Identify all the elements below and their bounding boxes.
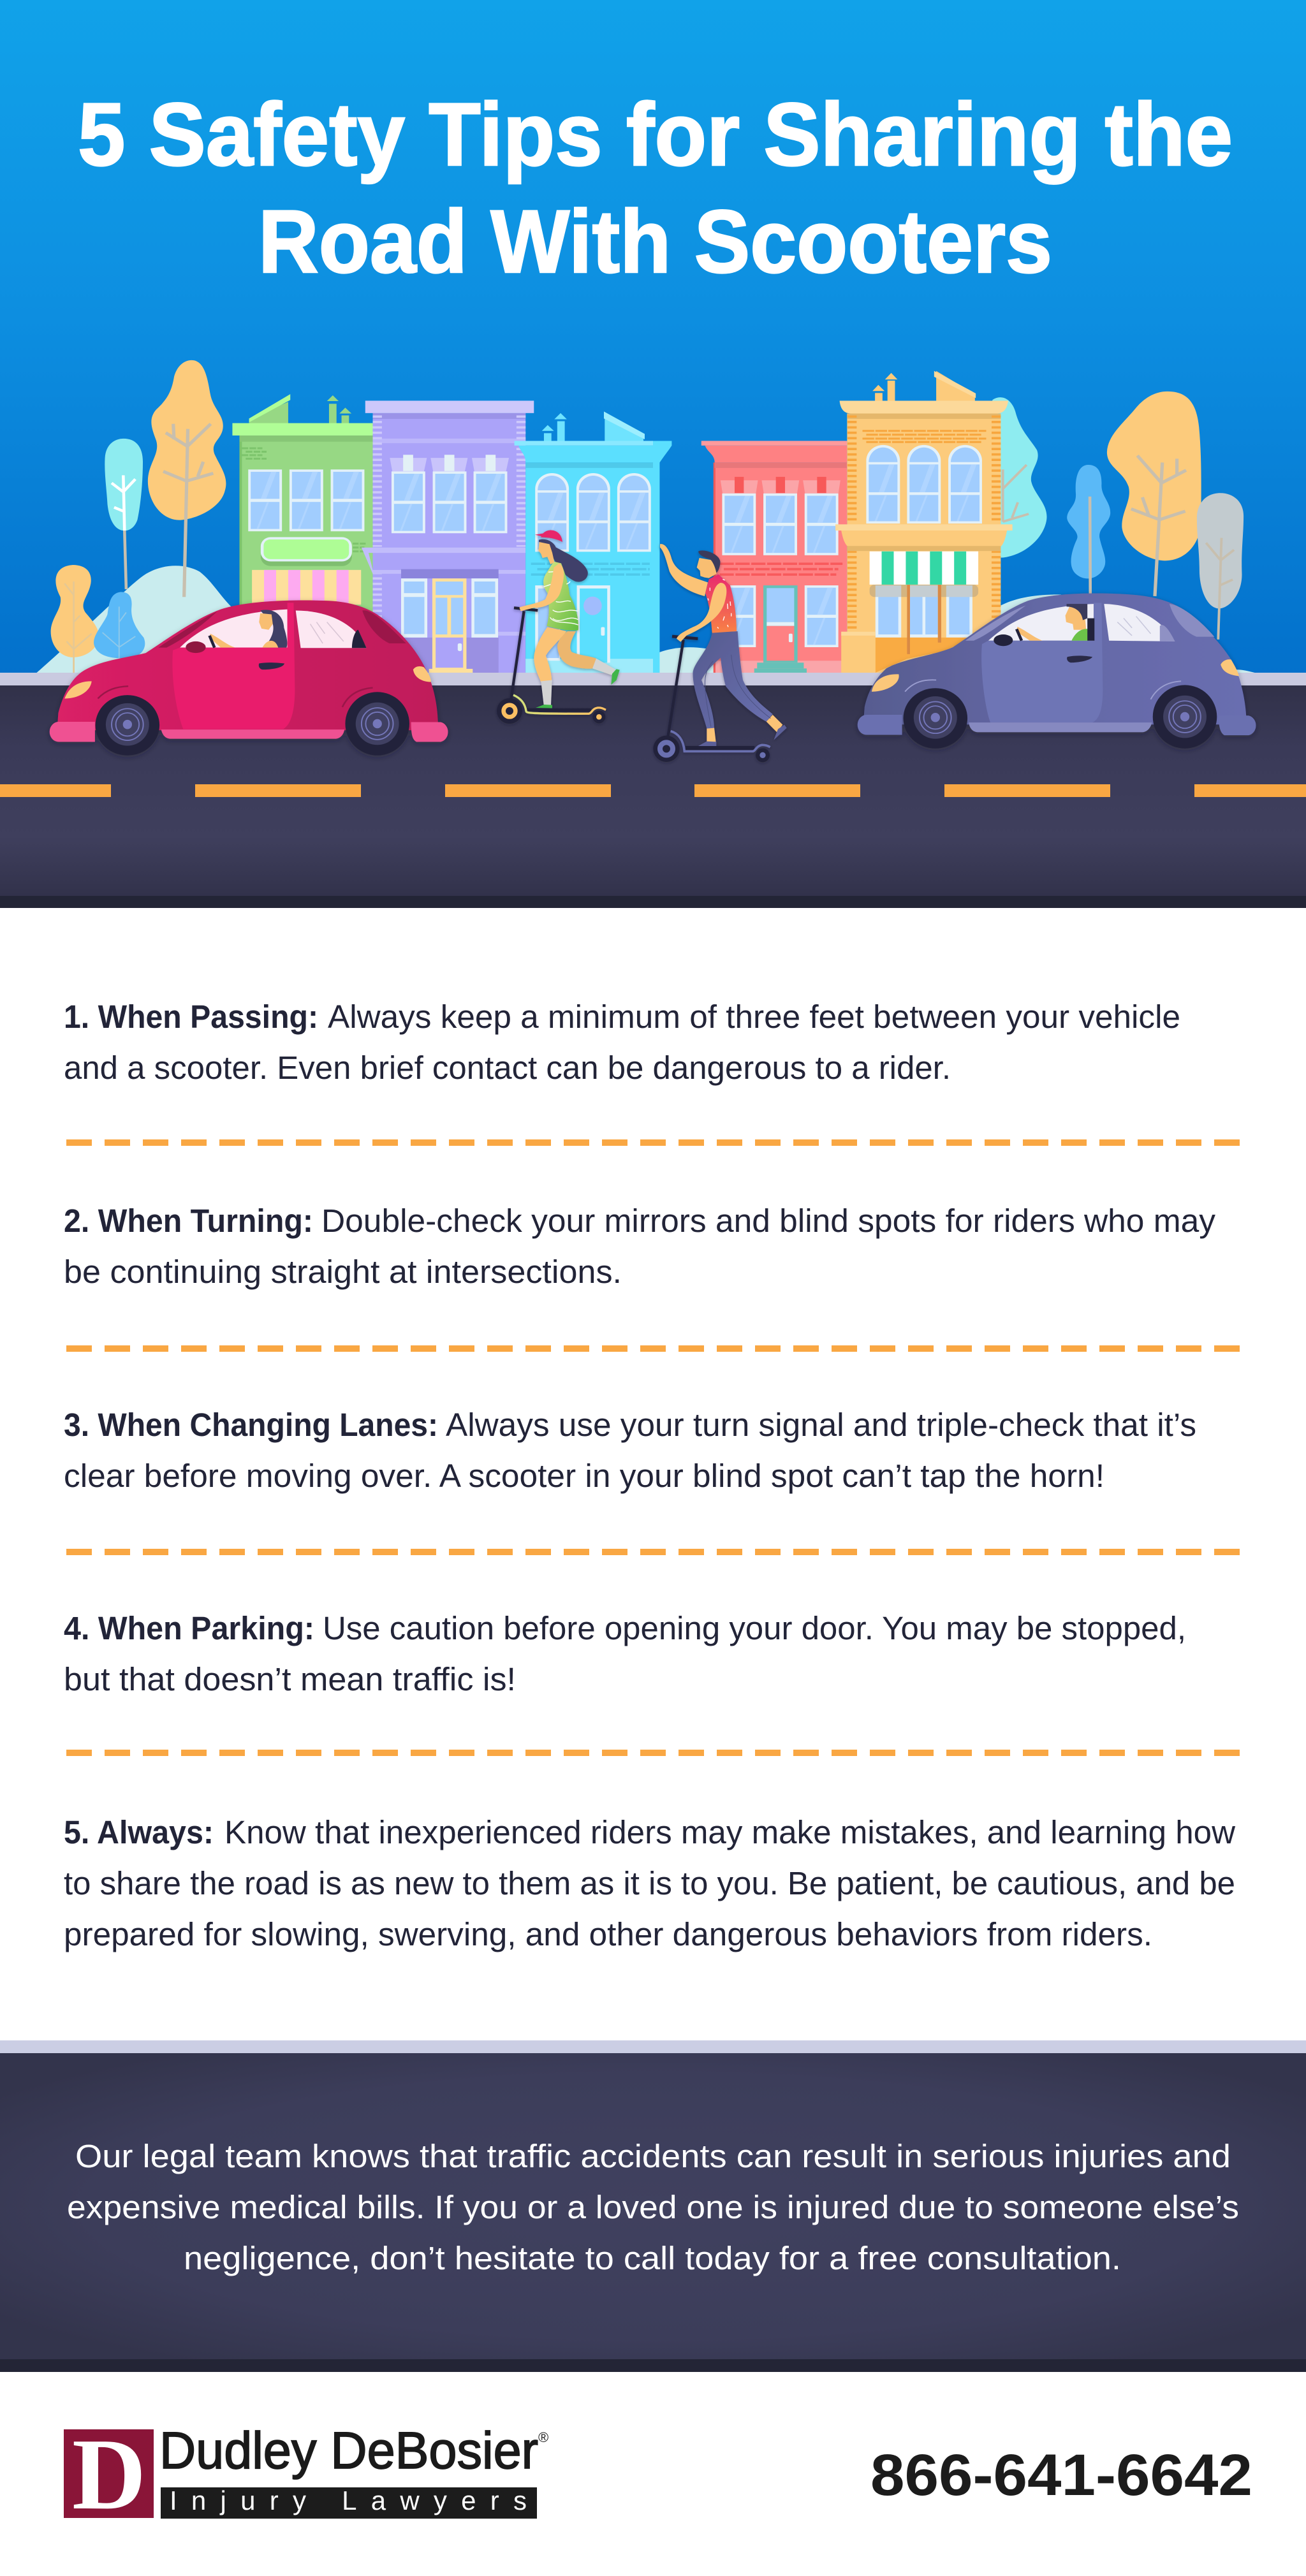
headlight	[872, 674, 899, 692]
tip 5	[64, 1814, 1235, 1952]
hill	[36, 566, 233, 673]
title	[78, 84, 1233, 291]
street scene left: hill, trees and buildings	[36, 360, 653, 673]
socks and shoes	[536, 659, 620, 708]
ankles and shoes	[698, 715, 787, 746]
tail light	[413, 666, 431, 682]
call-to-action panel	[0, 2053, 1306, 2359]
building: red	[701, 441, 847, 673]
front wheel	[96, 695, 159, 756]
trousers	[693, 631, 773, 729]
car windows	[180, 610, 367, 648]
call-to-action text	[67, 2138, 1239, 2276]
tip 3: Always use your turn signal and triple-check that it’s	[446, 1407, 1196, 1443]
roof and pillar accents	[158, 610, 406, 648]
pink car	[50, 600, 448, 756]
tip 2: Double-check your mirrors and blind spots for riders who may	[321, 1203, 1215, 1239]
raised arm	[660, 544, 708, 596]
tree: grey	[1197, 493, 1244, 640]
male driver	[1016, 604, 1094, 641]
building: yellow	[835, 371, 1013, 673]
call-to-action text: Our legal team knows that traffic accidents can result in serious injuries and	[75, 2138, 1231, 2174]
divider 1	[66, 1139, 1240, 1146]
woman on scooter	[497, 530, 620, 724]
tip 2: 2. When Turning:	[64, 1203, 313, 1239]
head	[697, 550, 720, 578]
lower windows	[876, 585, 972, 638]
tree: blue	[1067, 465, 1110, 594]
bumpers and sill	[858, 715, 1256, 735]
sidewalk	[0, 673, 1306, 685]
tip 2	[64, 1203, 1215, 1290]
wheel arch lines	[98, 686, 373, 707]
title: 5 Safety Tips for Sharing the	[78, 84, 1233, 184]
phone number: 866-641-6642	[870, 2443, 1252, 2508]
firm name: Dudley DeBosier	[159, 2422, 538, 2480]
tip 4: 4. When Parking:	[64, 1610, 314, 1646]
car windows	[988, 604, 1175, 641]
mirror	[994, 634, 1013, 646]
tip 2: be continuing straight at intersections.	[64, 1254, 622, 1290]
rear wheel	[345, 692, 409, 756]
arm	[519, 563, 564, 611]
street scene right: trees and buildings	[653, 371, 1255, 673]
call-to-action text: expensive medical bills. If you or a loved one is injured due to someone else’s	[67, 2189, 1239, 2225]
front arm	[677, 583, 726, 642]
window pediments	[390, 455, 509, 471]
door	[429, 578, 473, 673]
divider 3	[66, 1549, 1240, 1555]
awning	[252, 570, 361, 604]
front wheel	[904, 688, 967, 749]
tip 5: 5. Always:	[64, 1814, 214, 1850]
logo	[64, 2417, 548, 2531]
tip 1: 1. When Passing:	[64, 999, 318, 1035]
header sky background	[0, 0, 1306, 676]
tree: tall yellow	[148, 360, 226, 597]
tree: yellow right	[1107, 392, 1201, 596]
tree: blue	[94, 592, 145, 658]
hair	[539, 539, 588, 582]
door and steps	[754, 585, 807, 673]
tip 3: 3. When Changing Lanes:	[64, 1407, 438, 1443]
registered mark: ®	[538, 2429, 548, 2445]
building: purple	[362, 400, 534, 673]
sign	[261, 537, 352, 566]
building: cyan	[515, 411, 653, 673]
tree: mint behind yellow building	[992, 397, 1046, 557]
building: cyan edge	[653, 441, 671, 673]
purple car	[858, 594, 1256, 749]
divider 2	[66, 1345, 1240, 1352]
window and door	[535, 585, 610, 662]
hills	[653, 594, 1255, 673]
call-to-action bottom band	[0, 2359, 1306, 2372]
road lane markings	[0, 784, 1306, 797]
bumpers and sill	[50, 722, 448, 742]
shirt	[705, 574, 737, 633]
title: Road With Scooters	[258, 191, 1052, 291]
tagline: Injury Lawyers	[170, 2485, 527, 2515]
tree: small yellow	[51, 565, 99, 673]
call-to-action text: negligence, don’t hesitate to call today for a free consultation.	[184, 2240, 1121, 2276]
tip 1	[64, 999, 1180, 1086]
divider 4	[66, 1750, 1240, 1756]
tip 5: to share the road is as new to them as it is to you. Be patient, be cautious, and be	[64, 1865, 1235, 1901]
man on scooter	[653, 544, 787, 762]
scooter	[653, 636, 770, 762]
tree: cyan	[105, 439, 143, 589]
rear wheel	[1153, 685, 1217, 749]
cap	[535, 530, 562, 542]
roof and pillar accents	[965, 604, 1214, 641]
scooter	[497, 608, 606, 724]
tip 4: but that doesn’t mean traffic is!	[64, 1661, 516, 1697]
front leg	[534, 627, 566, 682]
road	[0, 685, 1306, 896]
car door	[172, 603, 295, 729]
back leg	[557, 631, 596, 669]
dress	[543, 562, 578, 631]
door handle	[1067, 655, 1092, 662]
building: green	[232, 394, 373, 613]
face	[538, 542, 554, 564]
tip 1: Always keep a minimum of three feet between your vehicle	[328, 999, 1180, 1035]
tip 3	[64, 1407, 1196, 1494]
headlight	[64, 681, 92, 699]
tail light	[1221, 659, 1239, 676]
tip 1: and a scooter. Even brief contact can be dangerous to a rider.	[64, 1050, 951, 1086]
door handle	[259, 662, 284, 670]
tip 4: Use caution before opening your door. You may be stopped,	[323, 1610, 1186, 1646]
mirror	[186, 641, 206, 653]
car door	[981, 603, 1103, 722]
woman driver	[210, 610, 287, 648]
tip 5: Know that inexperienced riders may make mistakes, and learning how	[224, 1814, 1235, 1850]
tip 3: clear before moving over. A scooter in your blind spot can’t tap the horn!	[64, 1458, 1104, 1494]
logo mark: D	[72, 2417, 146, 2531]
awning	[870, 552, 978, 585]
tip 5: prepared for slowing, swerving, and other dangerous behaviors from riders.	[64, 1916, 1152, 1952]
tip 4	[64, 1610, 1186, 1697]
wheel arch lines	[905, 680, 1181, 699]
lower windows	[401, 578, 498, 638]
tagline bar	[161, 2487, 537, 2519]
call-to-action top band	[0, 2040, 1306, 2053]
road bottom edge	[0, 896, 1306, 908]
